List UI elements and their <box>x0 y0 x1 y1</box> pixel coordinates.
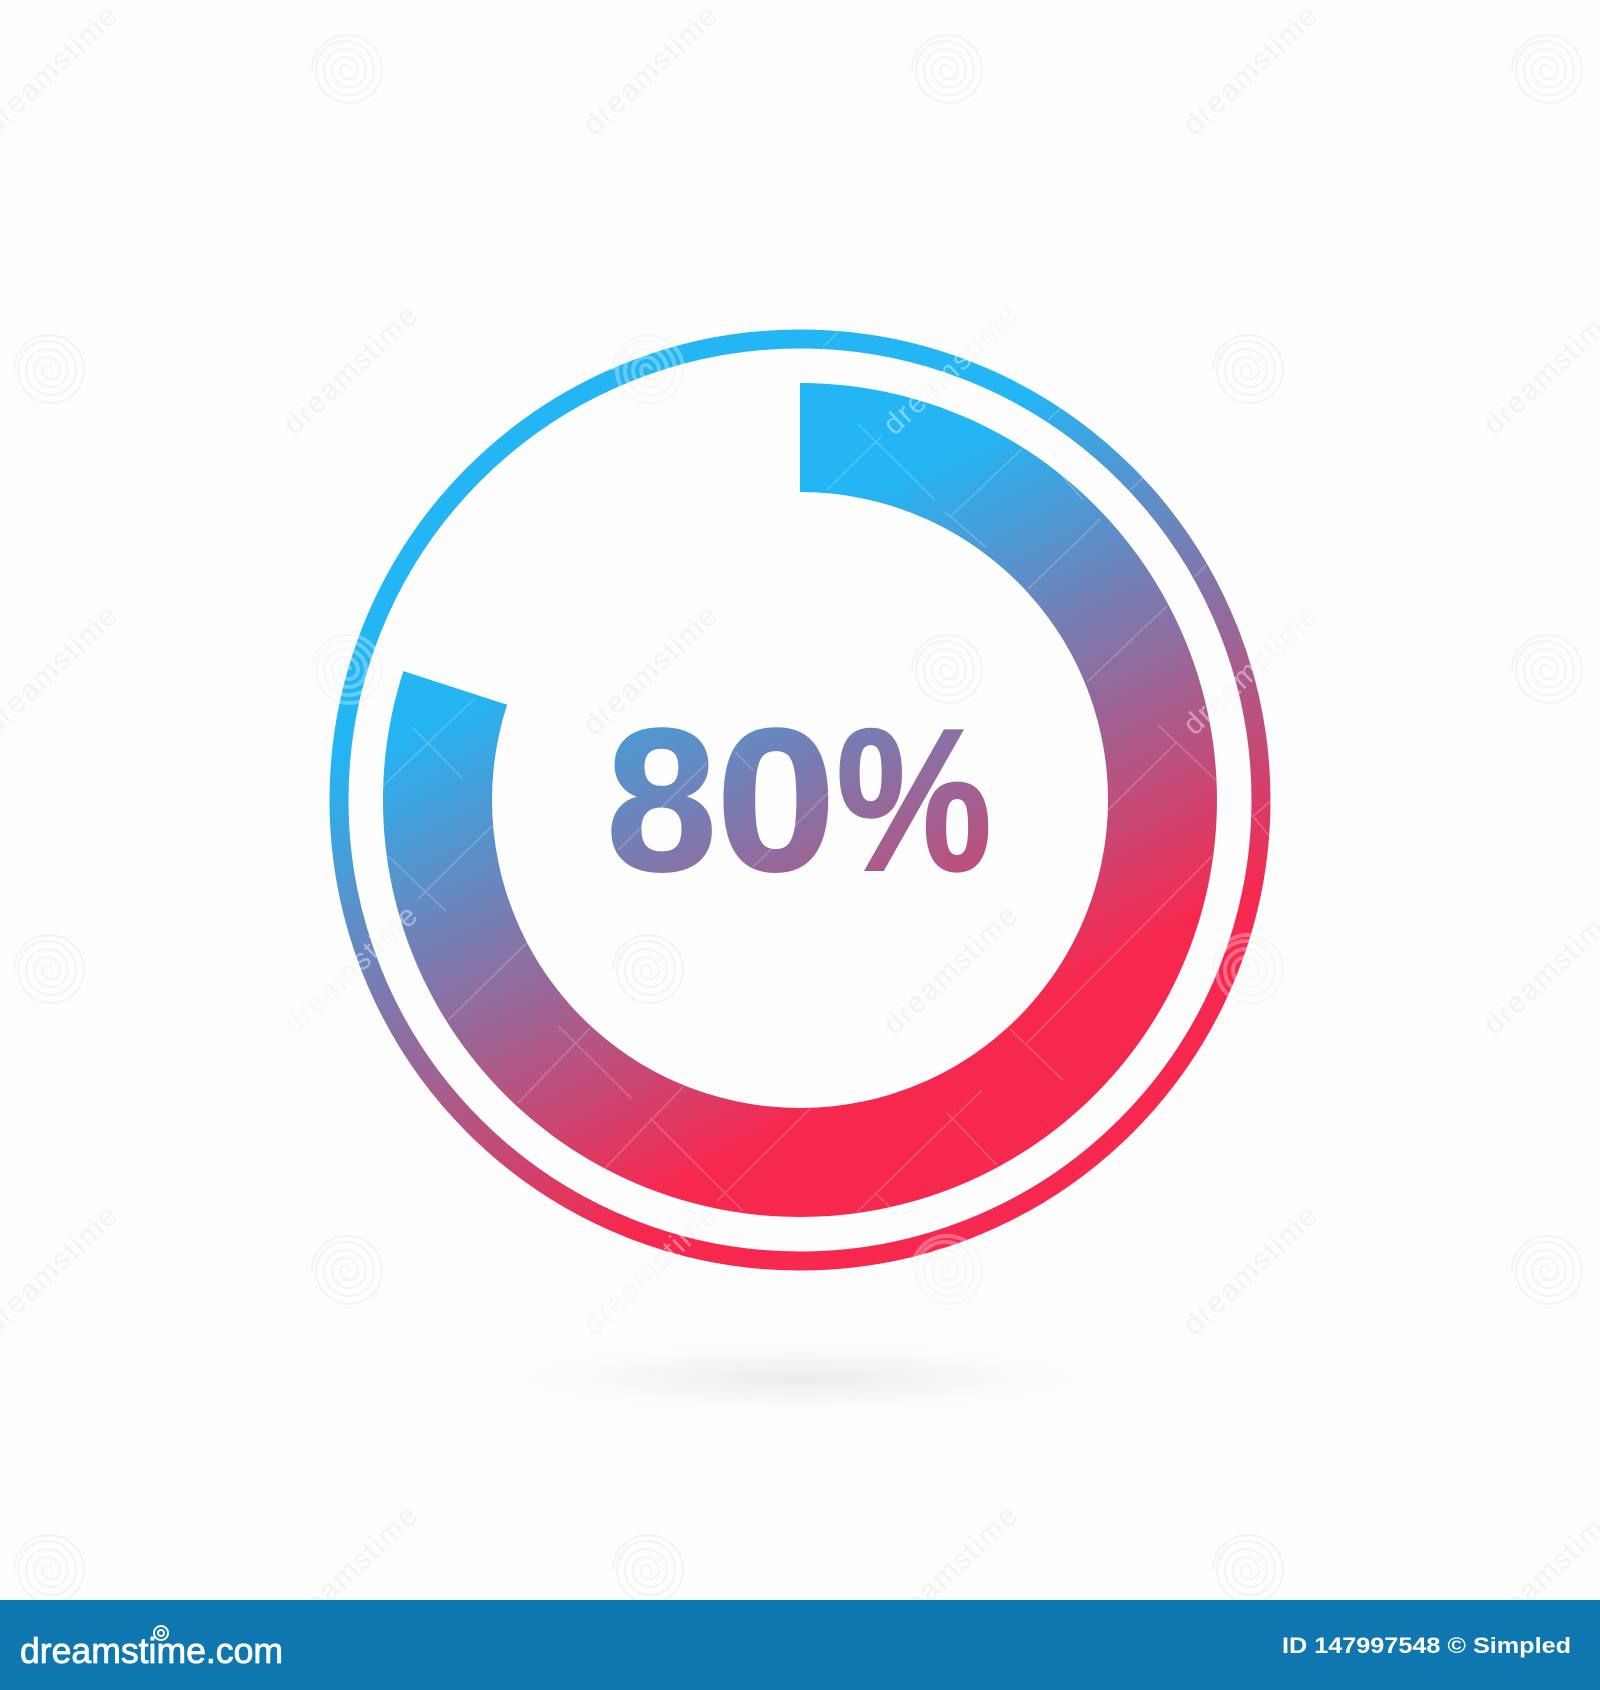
watermark wordmarks on background: dreamstime <box>577 0 724 142</box>
watermark wordmarks on background: dreamstime <box>877 899 1024 1042</box>
logo wordmark: dreamstime.com <box>20 1630 283 1671</box>
centre value: 80%: 0 <box>716 687 836 914</box>
footer banner <box>0 1600 1600 1690</box>
centre value: 80% <box>606 687 992 914</box>
watermark wordmarks on background: dreamstime <box>577 1199 724 1342</box>
watermark overlay on coloured shapes <box>277 299 1324 1342</box>
outer thin ring <box>339 339 1261 1261</box>
watermark wordmarks on background: dreamstime <box>277 899 424 1042</box>
logo spiral <box>154 1626 168 1640</box>
watermark overlay on coloured shapes: dreamstime <box>877 299 1024 442</box>
watermark wordmarks on background: dreamstime <box>1177 0 1324 142</box>
watermark wordmarks on background: dreamstime <box>1177 1199 1324 1342</box>
watermark wordmarks on background: dreamstime <box>877 1499 1024 1642</box>
watermark overlay on coloured shapes: dreamstime <box>1177 599 1324 742</box>
ground shadow <box>490 1338 1110 1418</box>
image credit: ID 147997548 © Simpled <box>1282 1633 1571 1658</box>
centre value: 80%: % <box>836 687 992 914</box>
watermark wordmarks on background: dreamstime <box>277 1499 424 1642</box>
watermark overlay on coloured shapes: dreamstime <box>577 1199 724 1342</box>
centre value: 80%: 8 <box>606 687 717 914</box>
watermark wordmarks on background: dreamstime <box>1177 599 1324 742</box>
watermark wordmarks on background: dreamstime <box>577 599 724 742</box>
watermark overlay on coloured shapes: dreamstime <box>277 899 424 1042</box>
watermark wordmarks on background: dreamstime <box>877 299 1024 442</box>
donut: 80% arc <box>383 383 1217 1217</box>
watermark wordmarks on background: dreamstime <box>277 299 424 442</box>
